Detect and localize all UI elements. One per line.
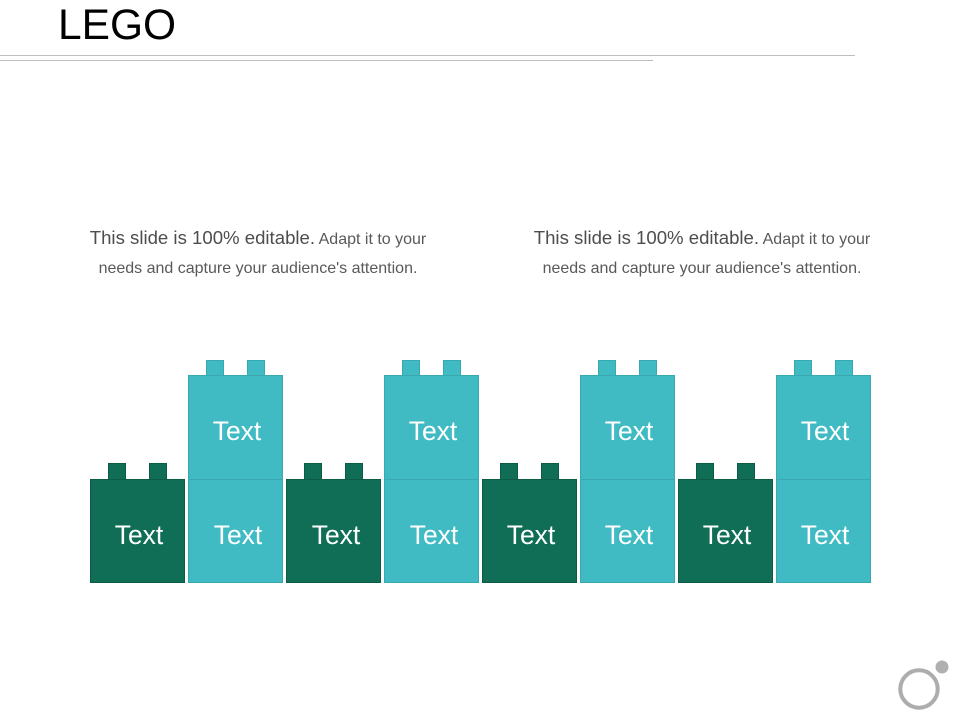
text block: left: needs and capture your audience's attention. xyxy=(99,260,417,277)
text block: right: needs and capture your audience's attention. xyxy=(543,260,861,277)
dark brick 3 xyxy=(482,463,577,583)
dark brick 3: Text xyxy=(507,520,555,550)
title rule: short xyxy=(0,60,653,61)
dark brick 1 xyxy=(90,463,185,583)
dark brick 1: Text xyxy=(115,520,163,550)
teal stack 2 xyxy=(384,360,479,583)
teal stack 4: Text xyxy=(801,520,849,550)
teal stack 3 xyxy=(580,360,675,583)
dark brick 2 xyxy=(286,463,381,583)
teal stack 1: Text xyxy=(213,416,261,446)
teal stack 2: Text xyxy=(410,520,458,550)
dark brick 4: Text xyxy=(703,520,751,550)
text block: left xyxy=(90,227,426,277)
text block: left: This slide is 100% editable. Adapt it to your xyxy=(90,227,426,248)
teal stack 4 xyxy=(776,360,871,583)
dark brick 4 xyxy=(678,463,773,583)
text block: right xyxy=(534,227,870,277)
teal stack 2: Text xyxy=(409,416,457,446)
lego chart xyxy=(90,360,871,583)
teal stack 4: Text xyxy=(801,416,849,446)
title rule: long xyxy=(0,55,855,56)
icon: logo ring and dot xyxy=(898,660,948,710)
teal stack 3: Text xyxy=(605,416,653,446)
teal stack 1: Text xyxy=(214,520,262,550)
teal stack 3: Text xyxy=(605,520,653,550)
teal stack 1 xyxy=(188,360,283,583)
dark brick 2: Text xyxy=(312,520,360,550)
text block: right: This slide is 100% editable. Adapt it to your xyxy=(534,227,870,248)
title: LEGO xyxy=(58,2,176,49)
